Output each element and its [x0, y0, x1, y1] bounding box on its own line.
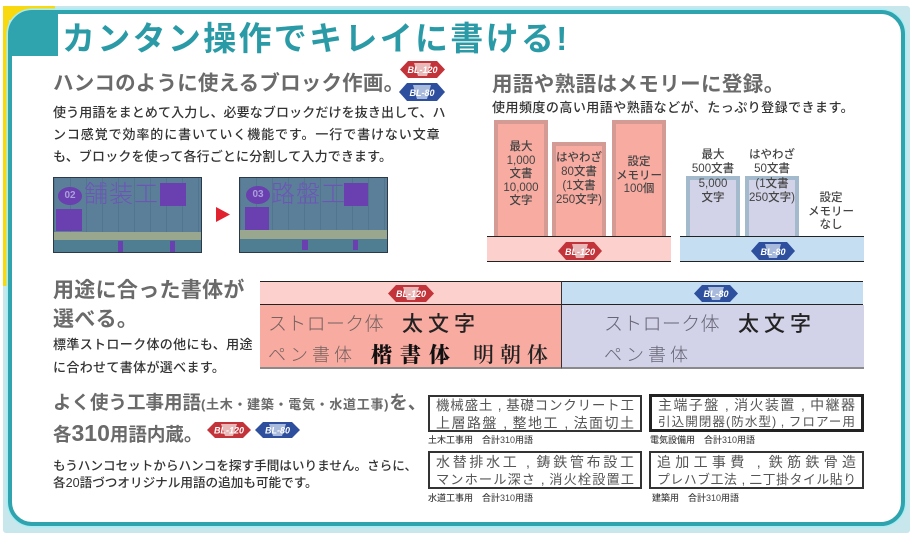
label: BL-80 no setting memory: 設定: [820, 192, 842, 204]
label: BL-80 hayawaza: 50文書: [754, 162, 790, 174]
LCD screen: after: [239, 177, 388, 253]
table cell: BL-120 fonts: 明朝体: [473, 343, 554, 367]
body text: built-in terms: 各20語づつオリジナル用語の追加も可能です。: [53, 476, 318, 490]
badge: BL-80: BL-80: [409, 88, 435, 98]
heading: typefaces line 2: 選べる。: [53, 308, 138, 331]
caption: civil: 土木工事用 合計310用語: [428, 435, 533, 445]
caption: electrical: 電気設備用 合計310用語: [650, 435, 755, 445]
yellow corner accent top: [3, 6, 55, 20]
body text: block drawing: 使う用語をまとめて入力し、必要なブロックだけを抜き出して、ハ: [53, 105, 446, 120]
table: typefaces: [260, 281, 864, 369]
table cell: BL-80 fonts: 太文字: [738, 313, 816, 336]
table header: BL-80: [561, 281, 863, 305]
body text: built-in terms: [53, 459, 417, 490]
panel: built-in terms text: [53, 392, 426, 490]
sample: building terms: プレハブ工法 , 二丁掛タイル貼り: [657, 472, 856, 487]
bar: BL-80 per document: (1文書: [755, 178, 789, 190]
sample: electrical terms: 主端子盤 , 消火装置 , 中継器: [658, 397, 855, 413]
caption: water: 水道工事用 合計310用語: [428, 493, 533, 503]
bar: BL-80 per document: [745, 176, 799, 236]
LCD screen: before: 02: [64, 190, 76, 201]
table cell: BL-80 fonts: [561, 305, 864, 369]
base band: BL-120: [487, 236, 671, 262]
label: BL-80 no setting memory: メモリー: [808, 206, 854, 218]
badge: BL-120: [388, 285, 434, 302]
bar: BL-120 documents: 1,000: [507, 154, 535, 166]
table cell: BL-120 fonts: ストローク体: [268, 314, 384, 335]
bar: BL-120 hayawaza: 80文書: [561, 166, 597, 178]
table cell: BL-80 fonts: ペン書体: [604, 345, 692, 365]
table cell: BL-120 fonts: 太文字: [402, 313, 480, 336]
label: BL-80 no setting memory: なし: [820, 219, 842, 231]
badge: BL-80: BL-80: [760, 247, 786, 257]
table header: BL-120: [260, 281, 561, 305]
sample: electrical terms: [649, 394, 864, 432]
bar: BL-120 setting memory: 100個: [624, 183, 654, 195]
badge: BL-80: [399, 83, 445, 101]
badge: BL-120: BL-120: [214, 426, 244, 436]
bar: BL-120 documents: 文書: [510, 168, 532, 180]
badge: BL-120: BL-120: [407, 65, 438, 75]
body text: typefaces: に合わせて書体が選べます。: [53, 360, 225, 375]
heading: memory: 用語や熟語はメモリーに登録。: [492, 73, 785, 96]
LCD screen: before: [53, 177, 202, 253]
LCD screen: after: 03: [252, 189, 264, 200]
badge: BL-120: [207, 422, 251, 438]
badge: BL-80: BL-80: [703, 289, 729, 299]
bar: BL-120 hayawaza: 250文字): [556, 194, 602, 206]
badge: BL-120: BL-120: [565, 247, 595, 257]
bar: BL-120 documents: 文字: [510, 195, 532, 207]
sample: water terms: [428, 451, 642, 489]
bar: BL-80 characters: 5,000: [699, 178, 727, 190]
title tab: [10, 12, 58, 56]
bar: BL-80 characters: [686, 176, 740, 236]
table cell: BL-120 fonts: ペン書体: [268, 345, 356, 365]
sample: electrical terms: 引込開閉器(防水型) , フロアー用: [658, 415, 855, 429]
bar: BL-120 hayawaza: (1文書: [562, 180, 596, 192]
label: BL-80 documents: [692, 148, 734, 174]
body text: typefaces: [53, 337, 253, 375]
body text: block drawing: ンコ感覚で効率的に書いていく機能です。一行で書けない文章: [53, 127, 441, 142]
body text: block drawing: も、ブロックを使って各行ごとに分割して入力できます。: [53, 149, 392, 164]
arrow: [216, 207, 230, 222]
bar: BL-80 characters: 文字: [702, 192, 724, 204]
body text: built-in terms: もうハンコセットからハンコを探す手間はいりません。さらに、: [53, 459, 417, 473]
bar: BL-120 hayawaza: [552, 142, 606, 236]
panel: memory: [487, 73, 864, 262]
sample: building terms: [649, 451, 864, 489]
bar: BL-120 documents: 最大: [510, 141, 532, 153]
label: BL-80 hayawaza: [749, 148, 795, 174]
body text: block drawing: [53, 105, 446, 164]
subheading: memory: 使用頻度の高い用語や熟語などが、たっぷり登録できます。: [492, 100, 854, 115]
panel: block drawing: [53, 61, 446, 253]
bar: BL-120 documents: 10,000: [503, 182, 539, 194]
badge: BL-80: [751, 242, 795, 260]
bar: BL-120 hayawaza: はやわざ: [556, 152, 602, 164]
sample: civil engineering terms: 機械盛土 , 基礎コンクリート工: [436, 398, 634, 413]
caption: building: 建築用 合計310用語: [652, 493, 739, 503]
LCD screen: before: 舗装工: [84, 181, 159, 208]
table cell: BL-80 fonts: ストローク体: [604, 314, 720, 335]
sample: building terms: 追加工事費 , 鉄筋鉄骨造: [657, 454, 856, 470]
heading: block drawing: ハンコのように使えるブロック作画。: [53, 72, 404, 95]
bar: BL-120 setting memory: メモリー: [616, 170, 662, 182]
bar: BL-120 setting memory: 設定: [628, 156, 650, 168]
badge: BL-120: [558, 242, 602, 260]
bar: BL-80 per document: 250文字): [749, 192, 795, 204]
title: カンタン操作でキレイに書ける!: [62, 20, 570, 57]
heading: typefaces: 用途に合った書体が: [53, 279, 245, 302]
yellow corner accent left: [3, 6, 9, 286]
heading: built-in terms line 2: 各310用語内蔵。: [53, 420, 202, 446]
sample: water terms: マンホール深さ , 消火栓設置工: [436, 472, 634, 487]
table cell: BL-120 fonts: [260, 305, 561, 369]
bar: BL-120 setting memory: [612, 120, 666, 236]
body text: typefaces: 標準ストローク体の他にも、用途: [53, 337, 253, 352]
panel: typefaces text: [53, 278, 253, 375]
base band: BL-80: [680, 236, 864, 262]
bar: BL-120 documents: [494, 120, 548, 236]
sample: civil engineering terms: 上層路盤 , 整地工 , 法面切土: [436, 415, 634, 431]
badge: BL-80: [694, 285, 738, 302]
label: BL-80 no setting memory: [808, 191, 854, 231]
badge: BL-80: BL-80: [265, 426, 290, 436]
sample: civil engineering terms: [428, 395, 642, 432]
badge: BL-120: BL-120: [396, 289, 426, 299]
sample: water terms: 水替排水工 , 鋳鉄管布設工: [436, 454, 634, 470]
LCD screen: after: 路盤工: [271, 181, 346, 208]
table cell: BL-120 fonts: 楷書体: [371, 343, 458, 367]
label: BL-80 hayawaza: はやわざ: [749, 149, 795, 161]
badge: BL-80: [255, 422, 300, 438]
label: BL-80 documents: 最大: [702, 149, 724, 161]
label: BL-80 documents: 500文書: [692, 162, 734, 174]
badge: BL-120: [400, 61, 445, 78]
heading: built-in terms: よく使う工事用語(土木・建築・電気・水道工事)を、: [53, 392, 426, 413]
